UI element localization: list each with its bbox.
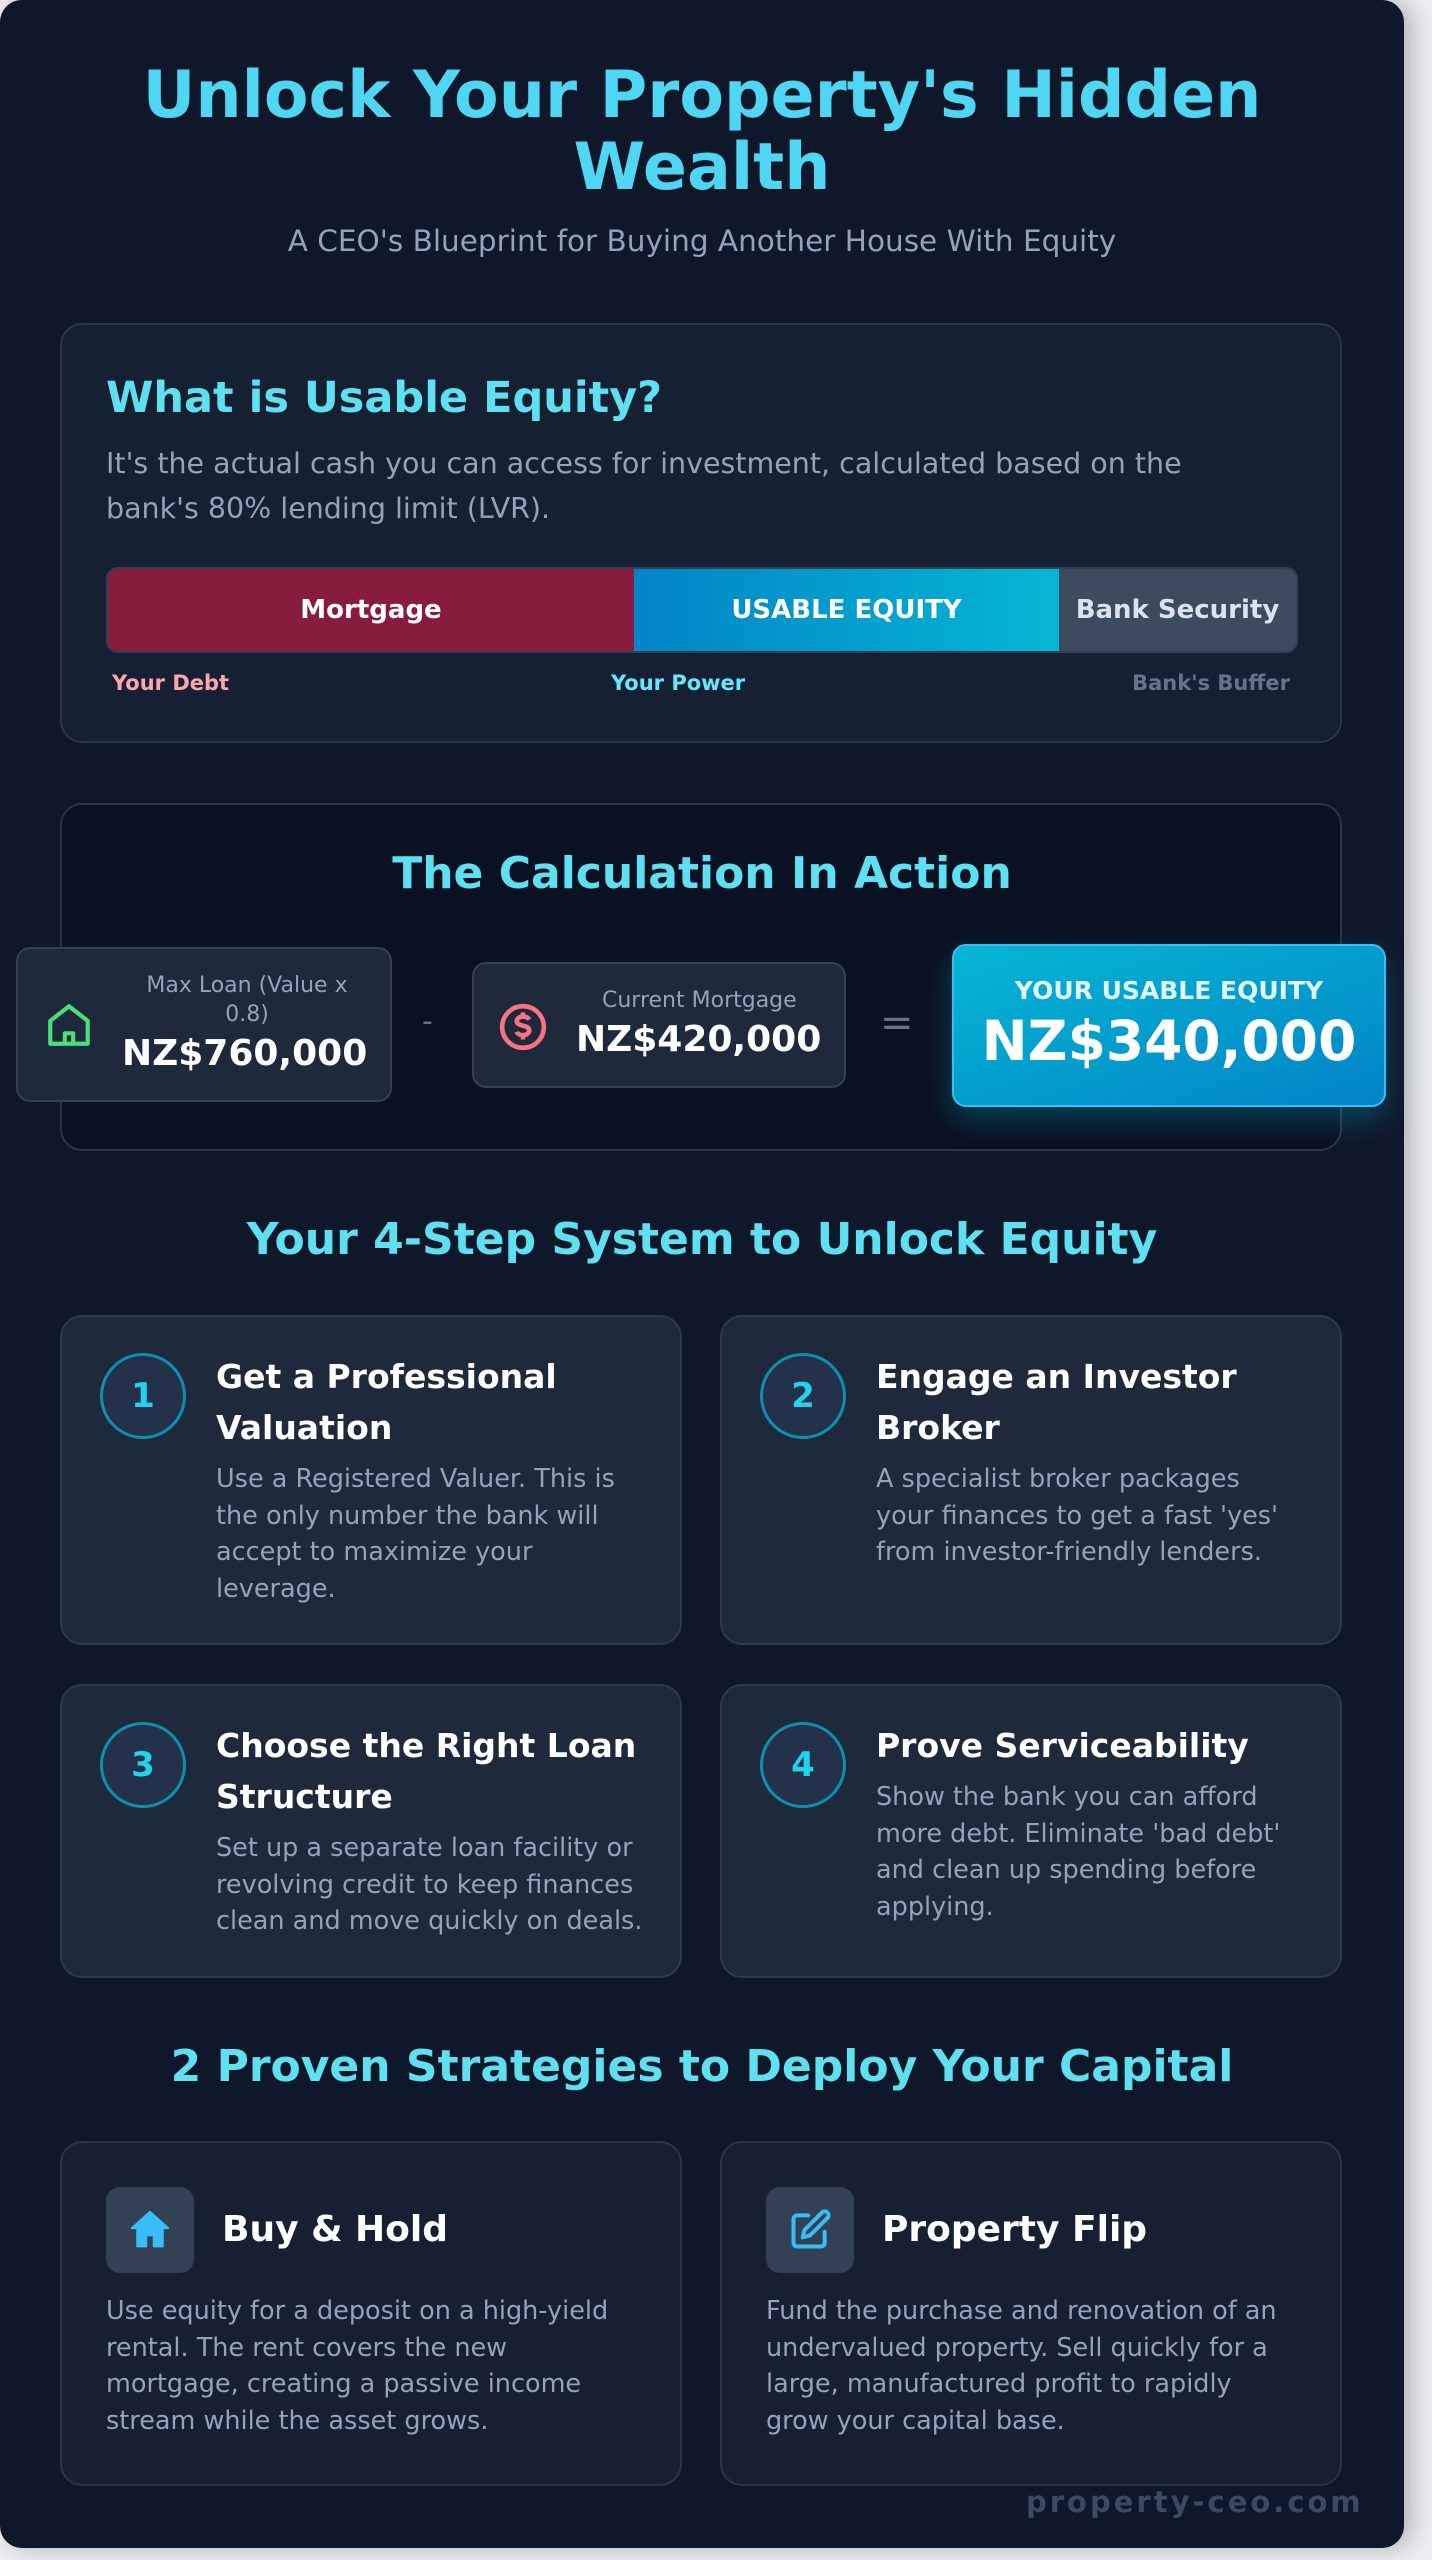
heading: What is Usable Equity? bbox=[106, 373, 662, 423]
bar labels: Your Debt bbox=[112, 671, 229, 695]
step 3: Choose the Right Loan Structure bbox=[216, 1726, 636, 1816]
icon: house bbox=[48, 1004, 90, 1046]
heading: 4-step: Your 4-Step System to Unlock Equity bbox=[247, 1214, 1157, 1265]
box: usable equity result: NZ$340,000 bbox=[982, 1009, 1356, 1073]
strategy: property flip: Fund the purchase and renovation of an undervalued property. Sell quickly for a large, manufactured profit to rapidly grow your capital base. bbox=[766, 2296, 1277, 2436]
title bbox=[143, 58, 1261, 205]
icon: edit bbox=[766, 2187, 854, 2273]
bar labels bbox=[112, 671, 1290, 695]
step 2: 2 bbox=[791, 1376, 815, 1416]
step 3: Set up a separate loan facility or revolving credit to keep finances clean and move quickly on deals. bbox=[216, 1833, 642, 1936]
heading: strategies: 2 Proven Strategies to Deploy Your Capital bbox=[171, 2041, 1233, 2092]
step 4 bbox=[720, 1684, 1342, 1978]
watermark: property-ceo.com bbox=[1026, 2485, 1364, 2519]
box: max loan: NZ$760,000 bbox=[122, 1033, 367, 1074]
box: current mortgage bbox=[472, 962, 846, 1088]
box: max loan bbox=[16, 947, 392, 1102]
step 4: Prove Serviceability bbox=[876, 1726, 1249, 1765]
strategy: buy & hold: Use equity for a deposit on a high-yield rental. The rent covers the new mortgage, creating a passive income stream while the asset grows. bbox=[106, 2296, 608, 2436]
step 4: Show the bank you can afford more debt. Eliminate 'bad debt' and clean up spending before applying. bbox=[876, 1782, 1280, 1922]
panel: what is usable equity bbox=[60, 323, 1342, 743]
box: usable equity result: YOUR USABLE EQUITY bbox=[1015, 976, 1323, 1005]
title: Unlock Your Property's Hidden bbox=[143, 58, 1261, 133]
strategy: property flip bbox=[720, 2141, 1342, 2486]
icon: house bbox=[106, 2187, 194, 2273]
step 3: 3 bbox=[131, 1745, 155, 1785]
bar labels: Bank's Buffer bbox=[1132, 671, 1290, 695]
strategy: buy & hold bbox=[60, 2141, 682, 2486]
box: current mortgage: NZ$420,000 bbox=[576, 1019, 821, 1060]
step 1: 1 bbox=[131, 1376, 155, 1416]
panel: calculation bbox=[60, 803, 1342, 1151]
box: current mortgage: Current Mortgage bbox=[602, 988, 797, 1013]
step 2 bbox=[720, 1315, 1342, 1645]
equity bar bbox=[106, 567, 1298, 653]
text block: It's the actual cash you can access for investment, calculated based on the bank's 80% lending limit (LVR). bbox=[106, 447, 1182, 525]
step 1: Get a Professional Valuation bbox=[216, 1357, 557, 1447]
step 1 bbox=[60, 1315, 682, 1645]
step 2: A specialist broker packages your finances to get a fast 'yes' from investor-friendly lenders. bbox=[876, 1464, 1278, 1567]
box: usable equity result bbox=[952, 944, 1386, 1107]
operator minus: - bbox=[422, 1004, 433, 1039]
icon: money bbox=[500, 1004, 546, 1050]
strategy: property flip: Property Flip bbox=[882, 2209, 1147, 2250]
step 1: Use a Registered Valuer. This is the only number the bank will accept to maximize your leverage. bbox=[216, 1464, 615, 1604]
step 3 bbox=[60, 1684, 682, 1978]
title: Wealth bbox=[574, 130, 830, 205]
step 4: 4 bbox=[791, 1745, 815, 1785]
subtitle: A CEO's Blueprint for Buying Another House With Equity bbox=[288, 224, 1116, 258]
operator equals: = bbox=[880, 1000, 914, 1046]
strategy: buy & hold: Buy & Hold bbox=[222, 2209, 448, 2250]
bar labels: Your Power bbox=[611, 671, 745, 695]
equity bar: Mortgage bbox=[300, 595, 442, 625]
heading: calculation: The Calculation In Action bbox=[392, 848, 1012, 899]
step 2: Engage an Investor Broker bbox=[876, 1357, 1237, 1447]
box: max loan: Max Loan (Value x 0.8) bbox=[146, 973, 348, 1027]
equity bar: Bank Security bbox=[1076, 595, 1279, 625]
equity bar: USABLE EQUITY bbox=[731, 595, 962, 625]
